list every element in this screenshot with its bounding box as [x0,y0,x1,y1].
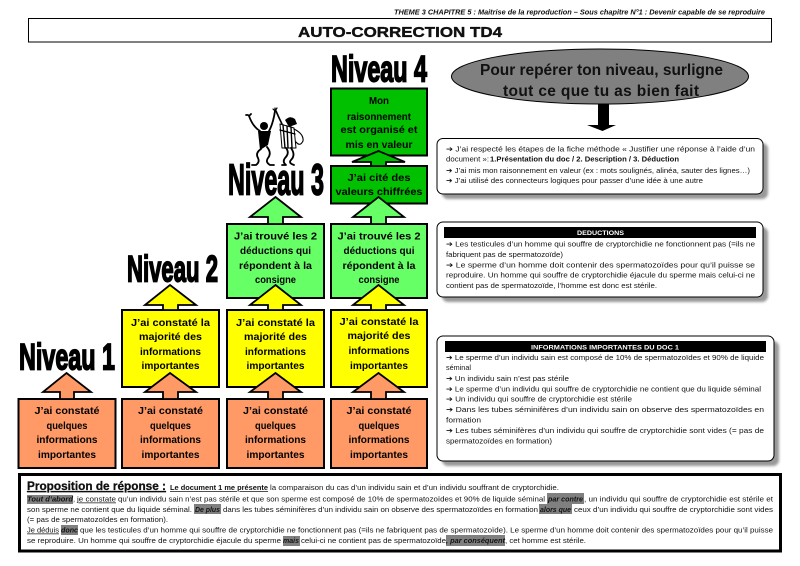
text: second paragraph [27,525,773,546]
box: information col 2: importantes [142,361,200,372]
box: level 4 reasoning [331,88,427,156]
panel: important information of document 1: ➔ Le sperme d’un individu qui souffre de cryptorchidie ne contient que du liquide séminal [446,384,761,394]
box: deductions col 4 [331,224,427,298]
panel: method checklist: ➔ J’ai mis mon raisonnement en valeur (ex : mots soulignés, alinéa, sauter des lignes…) [446,166,750,175]
box: information col 2: informations [140,347,201,358]
text: first paragraph: dans les tubes séminifères d’un individu sain on observe des spermatozoïdes en formation [223,505,538,514]
box: level 4 reasoning: raisonnement [347,112,412,123]
box: information col 3: importantes [246,361,305,372]
title banner: AUTO-CORRECTION TD4 [298,24,503,41]
text: second paragraph: se reproduire. Un homme qui souffre de cryptorchidie éjacule du sperme [27,536,281,545]
box: deductions col 3: consigne [255,275,296,286]
box: information col 4: majorité des [348,331,411,342]
box: some information col 1: J’ai constaté [34,406,100,417]
text: first paragraph [27,493,773,524]
panel: important information of document 1: ➔ Dans les tubes séminifères d’un individu sain on observe des spermatozoïdes en [446,405,764,414]
box: information col 4: informations [348,346,410,357]
box: level 3 cited values [331,166,427,204]
panel: important information of document 1: ➔ Un individu sain n’est pas stérile [446,374,569,383]
heading: proposition de réponse: Proposition de réponse : [27,481,166,493]
box: information col 2: majorité des [139,332,202,343]
text: first paragraph: Tout d’abord [27,494,74,504]
box: information col 4: importantes [350,361,408,372]
text: first paragraph: ceux d’un individu qui souffre de cryptorchidie sont vides [574,505,773,514]
box: some information col 4: informations [348,435,410,446]
text: second paragraph: Je déduis [27,526,59,534]
arrow: orange col 1 [43,373,91,399]
text: second paragraph: mais [283,536,299,545]
text: introduction sentence: Le document 1 me présente [170,483,268,492]
panel: method checklist: ➔ J’ai utilisé des connecteurs logiques pour passer d’une idée à une autre [446,176,703,185]
box: deductions col 4: consigne [358,275,400,286]
arrow: yellow col 4 [353,285,404,310]
box: information col 2 [122,310,219,387]
box: information col 4: J’ai constaté la [340,317,419,328]
box: some information col 3: importantes [246,450,305,461]
text: second paragraph: que les testicules d’un homme qui souffre de cryptorchidie ne fonctionnent pas (=ils ne fabriquent pas de spermatozoïde). Le sperme d’un homme doit contenir des spermatozoïdes pour qu’il puisse [80,526,773,534]
box: some information col 3: informations [245,435,306,446]
box: some information col 2: informations [140,435,201,446]
heading: Niveau 3: Niveau 3 [228,156,324,204]
panel: deductions: DEDUCTIONS [577,230,624,237]
box: level 3 cited values: valeurs chiffrées [336,187,423,198]
box: information col 3: informations [245,347,306,358]
text: second paragraph: celui-ci ne contient pas de spermatozoïde [301,536,446,545]
text: first paragraph: alors que [540,505,571,514]
arrow: orange col 3 [250,373,301,399]
text: first paragraph: par contre [547,494,583,504]
panel: deductions: ➔ Le sperme d’un homme doit contenir des spermatozoïdes pour qu’il puisse se [446,260,755,270]
box: deductions col 4: déductions qui [344,246,415,257]
panel: deductions: reproduire. Un homme qui souffre de cryptorchidie éjacule du sperme mais celui-ci ne [446,270,755,280]
text: first paragraph: , un individu qui souffre de cryptorchidie est stérile et [584,494,773,504]
box: deductions col 4: répondent à la [342,261,416,272]
panel: important information of document 1: spermatozoïdes en formation) [446,436,552,446]
arrow: orange col 2 [145,373,196,399]
text: first paragraph: son sperme ne contient que du liquide séminal. [27,505,192,514]
box: some information col 3: quelques [255,421,296,432]
callout: ellipse instruction [452,49,748,104]
text: introduction sentence [170,483,559,492]
heading: Niveau 1: Niveau 1 [19,336,115,378]
panel: important information of document 1: formation [446,416,481,424]
panel: important information of document 1: ➔ Les tubes séminifères d’un individu qui souffre de cryptorchidie sont vides (= pas de [446,426,764,435]
panel: method checklist: ➔ J’ai respecté les étapes de la fiche méthode « Justifier une réponse à l’aide d’un [446,144,755,154]
panel: proposed answer [20,474,780,551]
panel: important information of document 1: ➔ Un individu qui souffre de cryptorchidie est stérile [446,394,632,404]
arrow: orange col 4 [353,373,404,399]
box: level 4 reasoning: est organisé et [340,125,418,136]
level staircase [18,88,427,468]
box: information col 2: J’ai constaté la [131,318,210,329]
box: information col 4 [331,310,427,387]
text: introduction sentence: la comparaison du cas d’un individu sain et d’un individu souffrant de cryptorchidie. [270,483,559,492]
box: some information col 4: quelques [358,421,400,432]
arrow: yellow col 3 [250,285,301,310]
text: second paragraph: , cet homme est stérile. [505,536,586,545]
box: some information col 3 [227,399,324,468]
arrow: light green col 4 [353,197,404,224]
text: first paragraph: De plus [195,505,220,514]
box: deductions col 3: déductions qui [240,246,311,257]
text: first paragraph: qu’un individu sain n’est pas stérile et que son sperme est composé de 10% de spermatozoïdes et 90% de liquide séminal [118,494,545,504]
box: level 4 reasoning: mis en valeur [346,140,413,151]
heading: Niveau 4: Niveau 4 [331,48,427,90]
panel: deductions [437,222,768,302]
box: some information col 2 [122,399,219,468]
panel: deductions: fabriquent pas de spermatozoïde) [446,250,563,259]
panel: deductions: ➔ Les testicules d’un homme qui souffre de cryptorchidie ne fonctionnent pas (=ils ne [446,240,755,248]
arrow: black down arrow [587,104,616,131]
box: some information col 2: J’ai constaté [138,406,203,417]
box: some information col 2: importantes [142,450,200,461]
text: first paragraph: (= pas de spermatozoïdes en formation). [27,515,168,524]
box: information col 3: J’ai constaté la [236,318,315,329]
title banner [28,18,772,42]
panel: method checklist: 1.Présentation du doc / 2. Description / 3. Déduction [490,154,679,164]
box: level 4 reasoning: Mon [369,96,389,107]
panel: important information of document 1: INFORMATIONS IMPORTANTES DU DOC 1 [531,344,679,352]
box: some information col 1 [18,399,116,468]
heading: Niveau 2: Niveau 2 [127,248,218,290]
box: some information col 4: J’ai constaté [346,406,412,417]
text: first paragraph: , [73,494,75,504]
box: information col 3: majorité des [244,332,307,343]
box: some information col 4: importantes [350,450,408,461]
text: first paragraph: je constate [76,494,116,504]
box: level 3 cited values: J’ai cité des [348,173,411,184]
icon: two dancing figures [246,108,303,165]
box: some information col 1: informations [36,435,98,446]
text: second paragraph: , par conséquent [445,536,506,545]
arrow: light green col 3 [250,197,301,224]
box: some information col 1: quelques [46,421,88,432]
panel: important information of document 1 [437,336,779,466]
box: some information col 2: quelques [150,421,191,432]
box: some information col 3: J’ai constaté [243,406,308,417]
box: deductions col 3: répondent à la [239,261,312,272]
callout: ellipse instruction: Pour repérer ton niveau, surligne [480,62,723,79]
box: deductions col 4: J’ai trouvé les 2 [338,232,421,242]
callout: ellipse instruction: tout ce que tu as bien fait [503,83,699,100]
panel: important information of document 1: séminal [446,363,471,372]
box: deductions col 3 [227,224,324,298]
arrow: dark green col 4 [352,151,405,166]
panel: method checklist: document »: [446,154,489,164]
box: information col 3 [227,310,324,387]
panel: deductions: contient pas de spermatozoïde, l’homme est donc est stérile. [446,281,657,290]
text: second paragraph: donc [61,526,78,534]
box: deductions col 3: J’ai trouvé les 2 [234,232,317,242]
panel: important information of document 1: ➔ Le sperme d’un individu sain est composé de 10% de spermatozoïdes et 90% de liquide [446,353,764,362]
panel: method checklist [437,138,768,199]
header: chapter reference: THEME 3 CHAPITRE 5 : Maitrise de la reproduction – Sous chapitre N°1 : Devenir capable de se reproduire [394,8,765,16]
box: some information col 1: importantes [38,450,96,461]
box: some information col 4 [331,399,427,468]
arrow: yellow col 2 [145,285,196,310]
